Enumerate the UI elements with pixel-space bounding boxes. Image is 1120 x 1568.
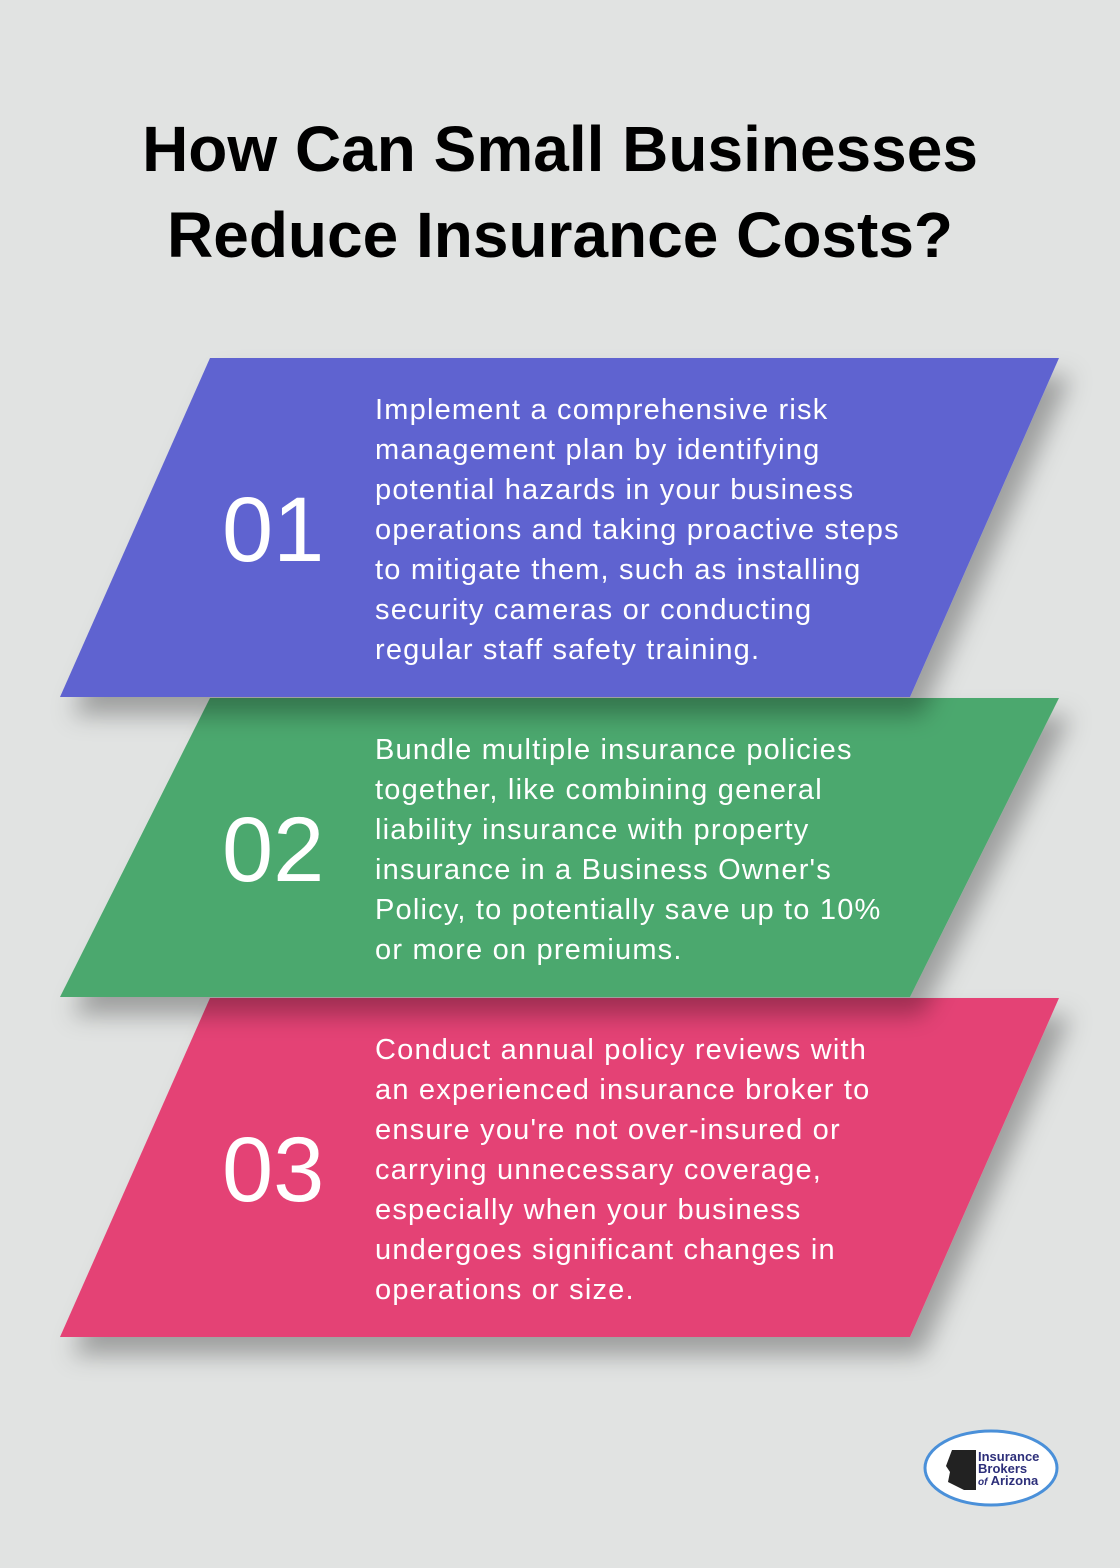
- logo: [924, 1430, 1058, 1506]
- logo: Insurance: [978, 1449, 1039, 1464]
- text 02: Bundle multiple insurance policies: [375, 734, 853, 766]
- text 01: potential hazards in your business: [375, 474, 854, 506]
- logo: of Arizona: [978, 1473, 1039, 1488]
- text 03: ensure you're not over-insured or: [375, 1114, 841, 1146]
- text 02: or more on premiums.: [375, 934, 683, 966]
- text 02: Policy, to potentially save up to 10%: [375, 894, 882, 926]
- text 01: to mitigate them, such as installing: [375, 554, 861, 586]
- text 03: carrying unnecessary coverage,: [375, 1154, 822, 1186]
- text 01: [375, 394, 900, 666]
- text 02: insurance in a Business Owner's: [375, 854, 832, 886]
- text 03: especially when your business: [375, 1194, 802, 1226]
- text 03: an experienced insurance broker to: [375, 1074, 870, 1106]
- text 01: security cameras or conducting: [375, 594, 812, 626]
- text 03: Conduct annual policy reviews with: [375, 1034, 867, 1066]
- title: Reduce Insurance Costs?: [167, 199, 953, 271]
- number 03: 03: [222, 1119, 324, 1221]
- logo: Brokers: [978, 1461, 1027, 1476]
- text 03: [375, 1034, 870, 1306]
- panel: 02 shape: [60, 698, 1059, 997]
- text 02: [375, 734, 882, 966]
- title: How Can Small Businesses: [142, 113, 978, 185]
- panel: 01 shape: [60, 358, 1059, 697]
- text 01: regular staff safety training.: [375, 634, 760, 666]
- panel: 03 shape: [60, 998, 1059, 1337]
- text 03: undergoes significant changes in: [375, 1234, 836, 1266]
- text 01: operations and taking proactive steps: [375, 514, 900, 546]
- text 02: together, like combining general: [375, 774, 823, 806]
- title: [142, 113, 978, 271]
- text 01: management plan by identifying: [375, 434, 820, 466]
- number 01: 01: [222, 479, 324, 581]
- text 02: liability insurance with property: [375, 814, 810, 846]
- text 01: Implement a comprehensive risk: [375, 394, 828, 426]
- text 03: operations or size.: [375, 1274, 635, 1306]
- number 02: 02: [222, 799, 324, 901]
